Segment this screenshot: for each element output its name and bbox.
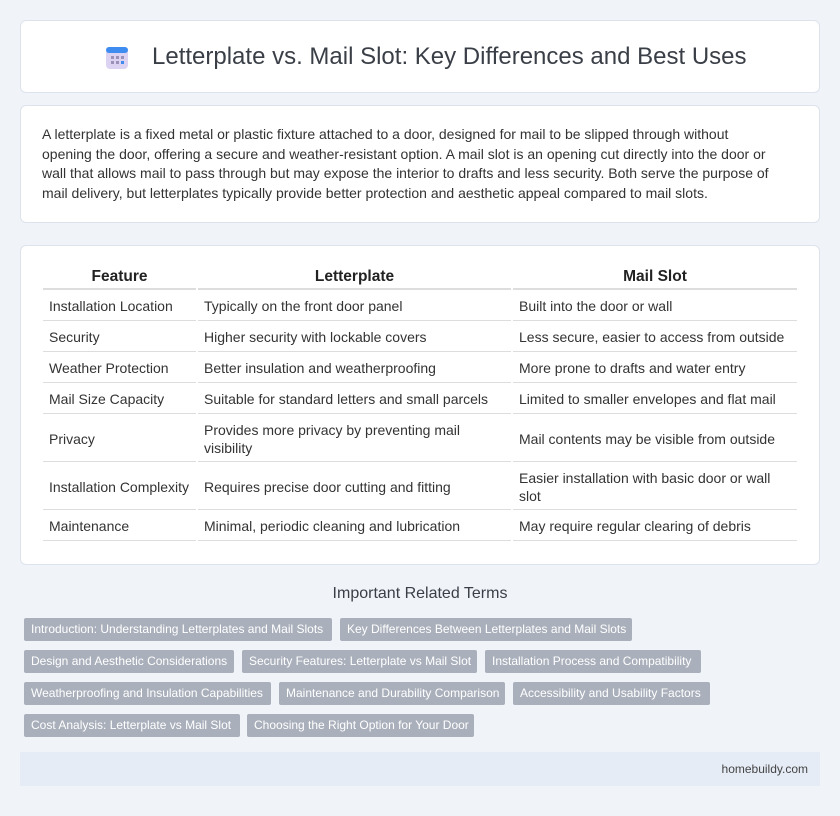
comparison table card [20,245,820,565]
comparison table card: Built into the door or wall [519,298,672,314]
comparison table card: Provides more privacy by preventing mail visibility [204,422,460,456]
comparison table card: Mail Slot [623,268,687,285]
icon: calendar [106,47,128,69]
related terms tags: Design and Aesthetic Considerations [31,654,227,668]
comparison table card: Installation Location [49,298,173,314]
comparison table card: Installation Complexity [49,478,189,494]
related terms heading: Important Related Terms [333,585,507,602]
comparison table card: More prone to drafts and water entry [519,360,745,376]
related terms tags: Weatherproofing and Insulation Capabilities [31,686,263,700]
footer [20,752,820,786]
comparison table card: Security [49,329,100,345]
comparison table card: Suitable for standard letters and small parcels [204,391,488,407]
comparison table card: Mail contents may be visible from outside [519,430,775,446]
title card [20,20,820,93]
related terms tags: Installation Process and Compatibility [492,654,691,668]
comparison table card: Mail Size Capacity [49,391,164,407]
title: Letterplate vs. Mail Slot: Key Differences and Best Uses [152,43,747,70]
related terms tags: Accessibility and Usability Factors [520,686,701,700]
footer: homebuildy.com [722,762,808,776]
comparison table card: Feature [92,268,148,285]
related terms tags: Introduction: Understanding Letterplates and Mail Slots [31,622,323,636]
related terms tags: Cost Analysis: Letterplate vs Mail Slot [31,718,231,732]
related terms tags: Key Differences Between Letterplates and Mail Slots [347,622,626,636]
comparison table card: Weather Protection [49,360,169,376]
comparison table card: Higher security with lockable covers [204,329,427,345]
related terms tags: Security Features: Letterplate vs Mail Slot [249,654,471,668]
comparison table card: Privacy [49,430,95,446]
comparison table card: May require regular clearing of debris [519,518,751,534]
intro text card: A letterplate is a fixed metal or plastic fixture attached to a door, designed for mail to be slipped through without opening the door, offering a secure and weather-resistant option. A mail slot is an opening cut directly into the door or wall that allows mail to pass through but may expose the interior to drafts and less security. Both serve the purpose of mail delivery, but letterplates typically provide better protection and aesthetic appeal compared to mail slots. [42,126,769,200]
comparison table card: Requires precise door cutting and fitting [204,478,451,494]
comparison table card: Minimal, periodic cleaning and lubrication [204,518,460,534]
comparison table card: Better insulation and weatherproofing [204,360,436,376]
comparison table card: Letterplate [315,268,394,285]
comparison table card: Easier installation with basic door or wall slot [519,470,770,504]
intro text card [20,105,820,223]
comparison table card: Typically on the front door panel [204,298,402,314]
comparison table card: Maintenance [49,518,129,534]
comparison table card: Less secure, easier to access from outside [519,329,784,345]
comparison table card: Limited to smaller envelopes and flat mail [519,391,776,407]
related terms tags: Choosing the Right Option for Your Door [254,718,469,732]
related terms tags: Maintenance and Durability Comparison [286,686,499,700]
